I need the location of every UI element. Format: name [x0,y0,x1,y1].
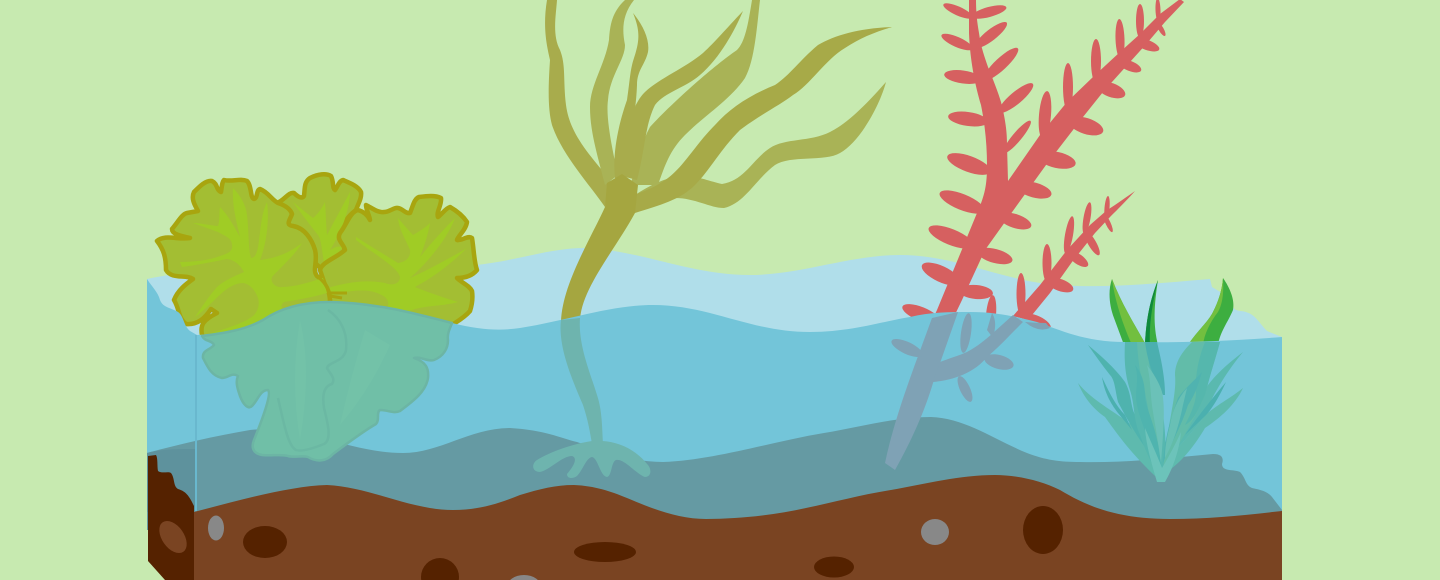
red plant under water [885,312,1050,470]
grass under water [1078,342,1243,482]
kelp stem [561,174,638,322]
gray pebble left [208,516,224,540]
large right central blade [1163,342,1220,470]
central blue blade [1145,342,1165,395]
left lettuce leaf [157,180,347,345]
right lower blade [1163,388,1243,474]
seabed seen through water [147,417,1282,530]
inner light blade [1147,365,1164,463]
upper left blade [1088,345,1156,460]
base highlight blades [1145,428,1181,482]
dark stone 2 [421,558,459,580]
soil left side face [148,455,194,580]
inner blade left [1135,365,1161,465]
red small branch [1013,191,1135,320]
inner right blade [1163,372,1202,463]
back water surface [147,248,1282,400]
sea lettuce above water [157,174,477,345]
side stone [154,516,192,558]
kelp frond: lower wavy light [635,82,886,210]
submerged leaves [889,312,1050,404]
right lettuce leaf [320,196,477,345]
dark stone 1 [243,526,287,558]
small left blade [1102,377,1132,430]
large left central blade [1125,342,1166,478]
inner right light blade [1165,388,1187,458]
gray pebble right [921,519,949,545]
submerged lettuce body [202,302,452,460]
kelp frond: long right [620,27,892,213]
kelp above water [545,0,892,322]
red plant above water [900,0,1184,335]
right central blade darker band [1185,342,1220,425]
submerged trunk [885,312,958,470]
kelp frond: short [614,13,648,180]
grass blade middle dark [1145,280,1158,345]
dark stone 5 [1023,506,1063,554]
submerged lettuce fold [295,320,390,440]
pebbles and stones in soil [154,506,1063,580]
far left blade [1078,383,1165,476]
submerged branch [933,315,1023,382]
kelp under water [533,318,650,478]
kelp frond: wide light blade [630,0,760,185]
grass blade middle [1145,280,1158,345]
small right blade [1185,382,1226,435]
inner glass side shading [147,449,195,512]
dark stone 3 [574,542,636,562]
kelp frond: upper right [618,11,743,180]
red leaves [900,0,1167,335]
grass blade right [1188,278,1233,345]
kelp frond: left middle [590,0,634,185]
grass blade right highlight [1188,278,1223,345]
right upper blade [1165,352,1243,462]
sea lettuce under water [202,302,452,460]
left central blade light band [1137,342,1161,465]
green grass above water [1110,278,1233,345]
kelp frond: far left [545,0,610,207]
submerged kelp stem [561,318,603,444]
red trunk and branch [930,0,1184,325]
gray pebble bottom [507,575,541,580]
glass corner line [195,335,197,511]
middle lettuce leaf [277,174,361,270]
front water body [147,279,1282,520]
grass blade left [1110,279,1146,345]
grass blade left highlight [1112,279,1146,345]
submerged lettuce veins [278,310,346,451]
kelp holdfast [533,441,650,478]
soil front face [194,475,1282,580]
dark stone 4 [814,556,854,578]
